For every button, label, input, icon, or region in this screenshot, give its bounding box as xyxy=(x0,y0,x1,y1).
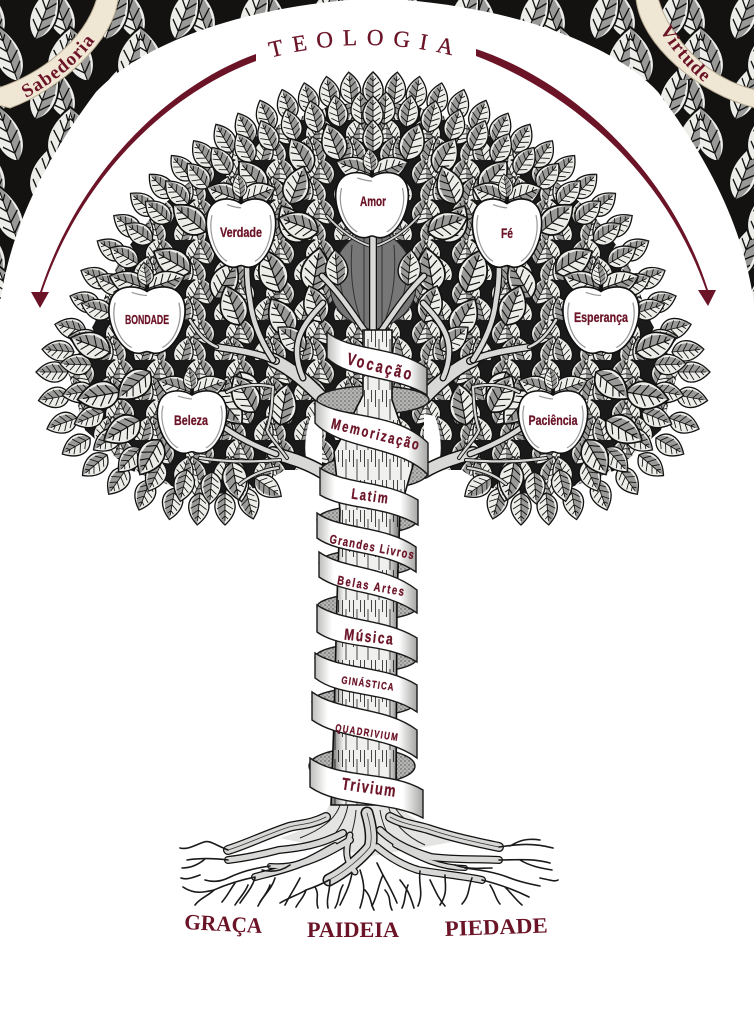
ribbon band: Grandes Livros: Grandes Livros xyxy=(328,533,415,562)
apple: Esperança: Esperança xyxy=(574,309,628,325)
apple: Paciência: Paciência xyxy=(528,412,578,428)
ribbon band: Belas Artes: Belas Artes xyxy=(336,574,405,599)
ribbon band: Música: Música xyxy=(343,625,394,648)
ribbon band: Latim xyxy=(320,468,418,525)
apple: Verdade xyxy=(203,173,279,267)
title: Teologia xyxy=(268,30,452,57)
canopy with leaves and branches xyxy=(36,71,710,526)
title: Teologia: TEOLOGIA xyxy=(268,30,452,57)
ribbon: Sabedoria: Sabedoria xyxy=(22,37,95,98)
label: Piedade: PIEDADE xyxy=(444,912,548,941)
ribbon band: Ginástica xyxy=(315,653,417,712)
apple: Beleza: Beleza xyxy=(174,412,208,428)
apple: Fé: Fé xyxy=(501,225,513,241)
ribbon band: Belas Artes xyxy=(319,552,417,613)
ribbon: Virtude xyxy=(636,0,754,108)
ribbon band: Trivium xyxy=(310,758,423,818)
ribbon band: Memorização: Memorização xyxy=(330,415,421,453)
apple: Amor xyxy=(332,148,412,238)
ribbon: Sabedoria xyxy=(0,0,118,108)
apple: Bondade xyxy=(105,262,189,353)
ribbon band: Latim: Latim xyxy=(350,485,389,507)
apple: Verdade: Verdade xyxy=(220,224,262,240)
ribbon band: Grandes Livros xyxy=(317,513,416,572)
apple: Beleza xyxy=(154,367,230,453)
apple: Fé xyxy=(469,173,545,267)
label: Graça: GRAÇA xyxy=(184,909,263,938)
ribbon band: Quadrivium xyxy=(312,692,417,758)
ribbon band: Trivium: Trivium xyxy=(341,775,397,801)
apple: Bondade: BONDADE xyxy=(125,312,169,327)
ribbon band: Vocação: Vocação xyxy=(345,350,414,384)
roots xyxy=(180,800,558,910)
label: Paideia: PAIDEIA xyxy=(307,917,399,942)
ribbon band: Ginástica: GINÁSTICA xyxy=(341,674,395,693)
arrow: left arc xyxy=(31,54,256,308)
arrow: right arc xyxy=(476,49,716,306)
ribbon band: Música xyxy=(317,605,417,662)
ribbon band: Quadrivium: QUADRIVIUM xyxy=(335,722,399,743)
apple: Esperança xyxy=(559,262,643,353)
ribbon: Virtude: Virtude xyxy=(662,24,708,82)
apple: Paciência xyxy=(515,367,591,453)
trunk with ribbon backs xyxy=(309,330,429,805)
apple: Amor: Amor xyxy=(360,193,386,209)
ribbon band: Memorização xyxy=(315,400,428,475)
ribbon band: Vocação xyxy=(327,332,427,395)
